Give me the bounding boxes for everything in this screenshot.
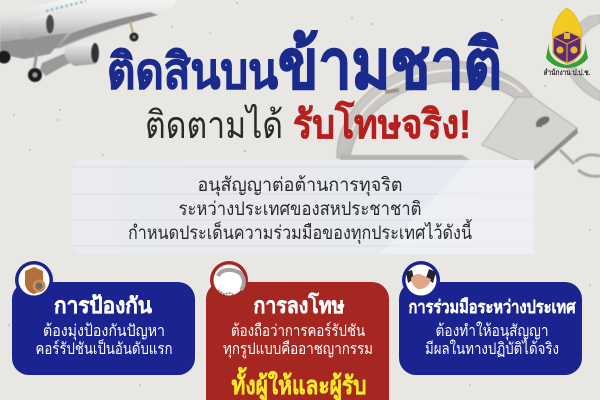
body text: ต้องถือว่าการคอร์รัปชัน bbox=[231, 321, 365, 340]
panel: convention intro bbox=[72, 160, 534, 254]
intro text: ระหว่างประเทศของสหประชาชาติ bbox=[178, 199, 422, 220]
logo: purple shield bbox=[553, 31, 581, 63]
body text bbox=[223, 321, 373, 359]
logo: gold emblem bbox=[553, 33, 581, 62]
intro text: กำหนดประเด็นความร่วมมือของทุกประเทศไว้ดังนี้ bbox=[128, 219, 472, 245]
title: line 2: รับโทษจริง! bbox=[293, 101, 471, 147]
logo: flame crest bbox=[552, 8, 582, 36]
heading: การลงโทษ bbox=[254, 292, 345, 318]
title: line 2: ติดตามได้ bbox=[145, 104, 283, 147]
icon: handcuffs bbox=[210, 261, 248, 299]
title: line 1 bbox=[107, 27, 502, 103]
body text: ต้องมุ่งป้องกันปัญหา bbox=[43, 322, 165, 341]
title: line 1: ติดสินบน bbox=[107, 45, 278, 99]
panel: prevention bbox=[12, 261, 195, 375]
logo: green wreath bbox=[546, 42, 588, 68]
illustration: airplane bbox=[0, 0, 177, 82]
intro text bbox=[128, 175, 472, 245]
panel: punishment bbox=[206, 261, 389, 400]
body text: ต้องทำให้อนุสัญญา bbox=[436, 321, 548, 341]
icon: shield and coin bbox=[15, 261, 53, 299]
icon: handshake bbox=[402, 261, 440, 299]
illustration: handcuffs bbox=[337, 15, 600, 176]
body text bbox=[425, 321, 559, 358]
body text bbox=[36, 322, 172, 358]
highlight text: ทั้งผู้ให้และผู้รับ bbox=[232, 366, 366, 400]
heading: การป้องกัน bbox=[54, 293, 152, 318]
logo caption: สำนักงาน ป.ป.ช. bbox=[544, 68, 590, 77]
logo bbox=[544, 8, 590, 77]
intro text: อนุสัญญาต่อต้านการทุจริต bbox=[198, 175, 402, 197]
body text: มีผลในทางปฏิบัติได้จริง bbox=[425, 339, 559, 358]
body text: ทุกรูปแบบคืออาชญากรรม bbox=[223, 340, 373, 359]
title: line 2 bbox=[145, 101, 471, 147]
panel: international cooperation bbox=[399, 261, 582, 375]
body text: คอร์รัปชันเป็นอันดับแรก bbox=[36, 338, 172, 358]
title: line 1: ข้ามชาติ bbox=[278, 27, 502, 103]
